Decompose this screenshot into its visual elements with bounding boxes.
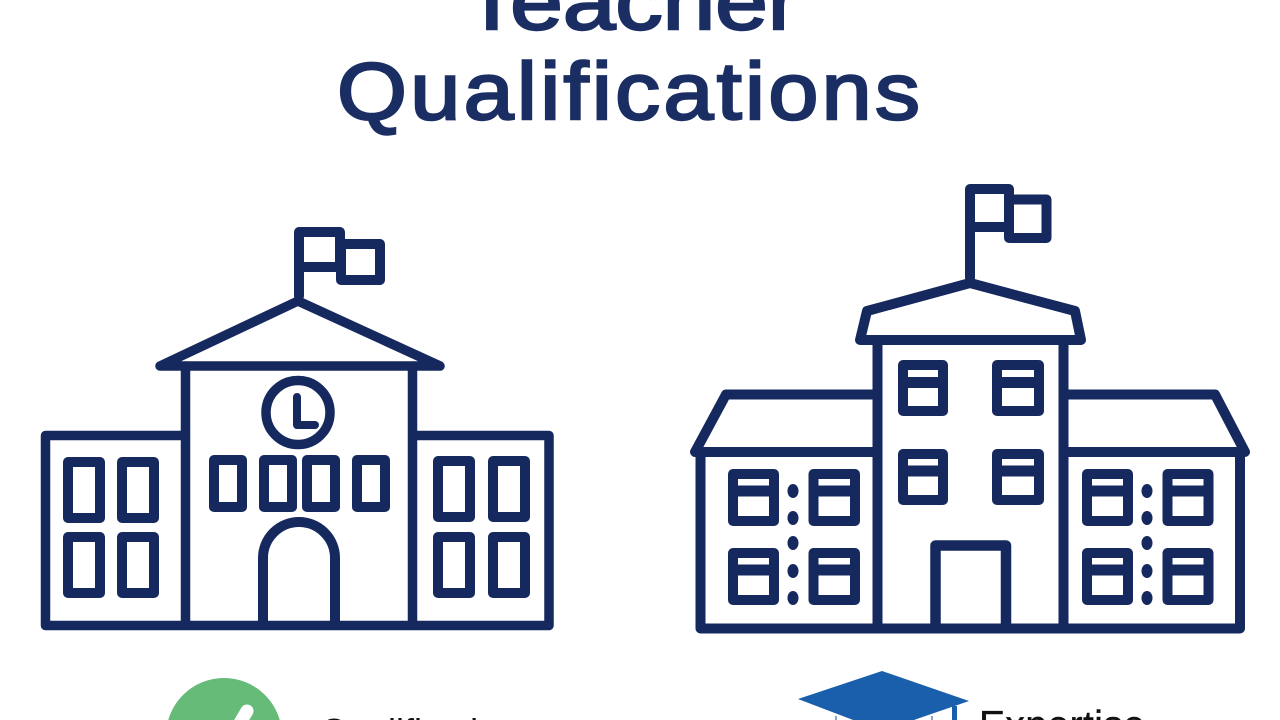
wings xyxy=(695,394,1245,628)
icon: right school building xyxy=(695,189,1245,628)
icon: graduation cap xyxy=(798,671,969,720)
central block xyxy=(878,340,1064,628)
windows xyxy=(733,365,1208,600)
central block and wings xyxy=(46,366,549,626)
central windows xyxy=(214,460,385,507)
roof xyxy=(860,283,1081,340)
title: Qualifications xyxy=(337,47,923,137)
left wing windows xyxy=(68,462,154,593)
flag xyxy=(299,232,380,296)
dots xyxy=(788,484,1152,605)
icon: left school building xyxy=(46,232,549,626)
title xyxy=(337,0,923,137)
icon: green check badge xyxy=(166,678,282,720)
flag xyxy=(970,189,1046,278)
clock xyxy=(266,380,330,444)
door xyxy=(263,522,335,625)
door xyxy=(936,546,1006,625)
right wing windows xyxy=(438,461,525,593)
roof xyxy=(160,301,440,366)
